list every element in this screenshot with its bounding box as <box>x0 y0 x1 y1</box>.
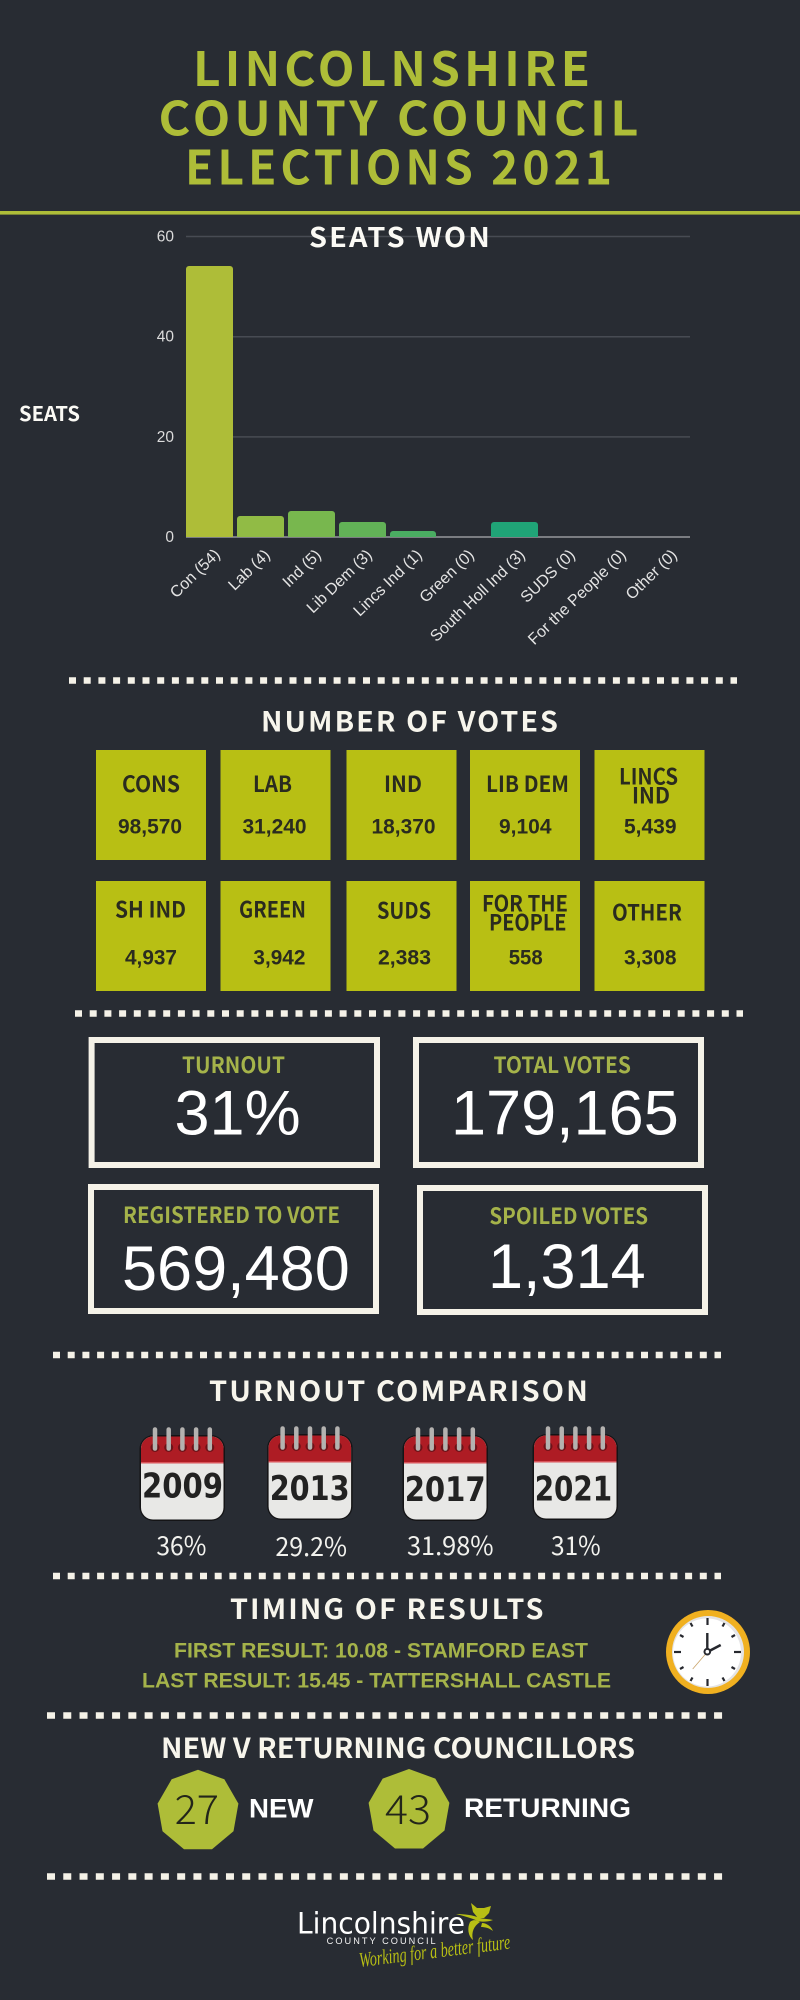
calendar 2013 <box>267 1428 353 1520</box>
title: COUNTY COUNCIL <box>158 80 642 150</box>
turnout 2013: 29.2% <box>275 1527 347 1564</box>
badge: 27 <box>158 1770 238 1849</box>
panel: turnout <box>92 1040 377 1165</box>
card: Ind: IND <box>384 767 422 799</box>
card: Lab: LAB <box>253 767 292 799</box>
badge: 43 <box>369 1769 449 1848</box>
panel: spoiled votes <box>420 1188 705 1312</box>
card: Cons: CONS <box>122 767 180 799</box>
panel: total votes: 179,165 <box>451 1078 679 1148</box>
card: Green: 3,942 <box>253 946 305 969</box>
calendar 2009: 2009 <box>142 1467 223 1507</box>
card: Other: 3,308 <box>624 946 677 969</box>
icon: logo figure <box>456 1903 493 1940</box>
y axis title: SEATS <box>19 398 80 427</box>
x axis labels: Con (54) <box>167 546 224 602</box>
y axis labels: 40 <box>157 329 174 346</box>
y axis labels: 60 <box>157 228 174 246</box>
panel: spoiled votes: SPOILED VOTES <box>489 1199 648 1231</box>
card: Other <box>594 881 704 991</box>
x axis labels: South Holl Ind (3) <box>427 547 529 645</box>
turnout 2009: 36% <box>156 1526 206 1563</box>
badge: 27: 27 <box>175 1778 219 1836</box>
title: LINCOLNSHIRE <box>193 31 594 100</box>
card: Lab: 31,240 <box>242 816 306 838</box>
bar chart: seats won <box>19 216 690 648</box>
panel: total votes: TOTAL VOTES <box>494 1048 631 1080</box>
x axis labels: Other (0) <box>623 547 681 603</box>
card: Cons <box>96 750 206 860</box>
card: Lincs Ind: IND <box>632 778 670 810</box>
x axis labels: Lab (4) <box>225 547 274 594</box>
card: Lab <box>220 750 330 860</box>
heading: turnout comparison: TURNOUT COMPARISON <box>209 1370 590 1410</box>
panel: number of votes grid <box>96 750 704 991</box>
card: SH Ind: SH IND <box>115 893 186 925</box>
panel: turnout: 31% <box>174 1078 301 1148</box>
card: SUDS: 2,383 <box>378 946 431 969</box>
x axis labels: Green (0) <box>417 547 478 606</box>
card: Green: GREEN <box>239 893 306 925</box>
card: Lincs Ind: LINCS <box>619 760 678 792</box>
heading: timing of results: TIMING OF RESULTS <box>230 1588 546 1628</box>
label: returning: RETURNING <box>464 1793 631 1823</box>
panel: registered to vote: 569,480 <box>122 1234 350 1304</box>
card: For the People: 558 <box>509 946 543 969</box>
heading: number of votes: NUMBER OF VOTES <box>261 700 560 740</box>
label: new: NEW <box>249 1793 314 1823</box>
calendar 2021: 2021 <box>535 1470 612 1510</box>
text: first and last result <box>142 1640 611 1693</box>
x axis labels: Lib Dem (3) <box>304 547 376 617</box>
logo: Lincolnshire County Council: Working for a better future <box>358 1930 511 1972</box>
card: Other: OTHER <box>612 896 682 928</box>
x axis labels: Ind (5) <box>280 547 325 591</box>
calendar 2017: 2017 <box>405 1470 486 1510</box>
card: Lib Dem <box>470 750 580 860</box>
card: Lib Dem: LIB DEM <box>486 767 569 799</box>
logo: Lincolnshire County Council: COUNTY COUNCIL <box>327 1936 438 1946</box>
card: Lincs Ind <box>594 750 704 860</box>
panel: turnout comparison calendars <box>140 1428 618 1564</box>
panel: spoiled votes: 1,314 <box>488 1232 646 1302</box>
card: SH Ind <box>96 881 206 991</box>
card: Ind <box>346 750 456 860</box>
card: For the People <box>470 881 580 991</box>
bars <box>186 266 538 537</box>
y axis labels <box>157 228 174 546</box>
card: Ind: 18,370 <box>372 816 436 838</box>
logo: Lincolnshire County Council <box>297 1903 511 1972</box>
x axis labels <box>167 546 681 648</box>
panel: turnout: TURNOUT <box>182 1048 285 1080</box>
x axis labels: For the People (0) <box>525 547 630 648</box>
y axis labels: 0 <box>165 529 174 546</box>
x axis labels: SUDS (0) <box>518 547 579 606</box>
card: For the People: PEOPLE <box>489 906 566 938</box>
text: first and last result: FIRST RESULT: 10.08 - STAMFORD EAST <box>174 1640 588 1663</box>
title: ELECTIONS 2021 <box>185 130 616 198</box>
new councillors count <box>158 1770 314 1849</box>
card: SUDS <box>346 881 456 991</box>
x axis labels: Lincs Ind (1) <box>351 547 426 620</box>
panel: total votes <box>416 1040 701 1165</box>
panel: registered to vote <box>91 1187 376 1311</box>
calendar 2009 <box>140 1430 225 1521</box>
card: Green <box>220 881 330 991</box>
card: Lib Dem: 9,104 <box>499 816 552 838</box>
card: For the People: FOR THE <box>482 886 568 918</box>
calendar 2017 <box>402 1430 488 1521</box>
badge: 43: 43 <box>385 1778 431 1836</box>
chart heading: SEATS WON <box>309 216 492 255</box>
icon: clock <box>666 1610 750 1694</box>
turnout 2021: 31% <box>551 1526 601 1563</box>
text: first and last result: LAST RESULT: 15.45 - TATTERSHALL CASTLE <box>142 1670 611 1693</box>
card: Lincs Ind: 5,439 <box>624 816 676 838</box>
y axis labels: 20 <box>157 429 174 446</box>
heading: new v returning councillors: NEW V RETURNING COUNCILLORS <box>161 1727 635 1767</box>
card: SH Ind: 4,937 <box>125 946 177 969</box>
logo: Lincolnshire County Council: Lincolnshire <box>297 1906 465 1940</box>
returning councillors count <box>369 1769 631 1848</box>
card: Cons: 98,570 <box>118 816 182 838</box>
title <box>158 31 642 198</box>
calendar 2021 <box>532 1428 618 1520</box>
card: SUDS: SUDS <box>377 894 431 926</box>
calendar 2013: 2013 <box>270 1469 350 1509</box>
turnout 2017: 31.98% <box>407 1526 494 1563</box>
panel: registered to vote: REGISTERED TO VOTE <box>123 1198 340 1230</box>
